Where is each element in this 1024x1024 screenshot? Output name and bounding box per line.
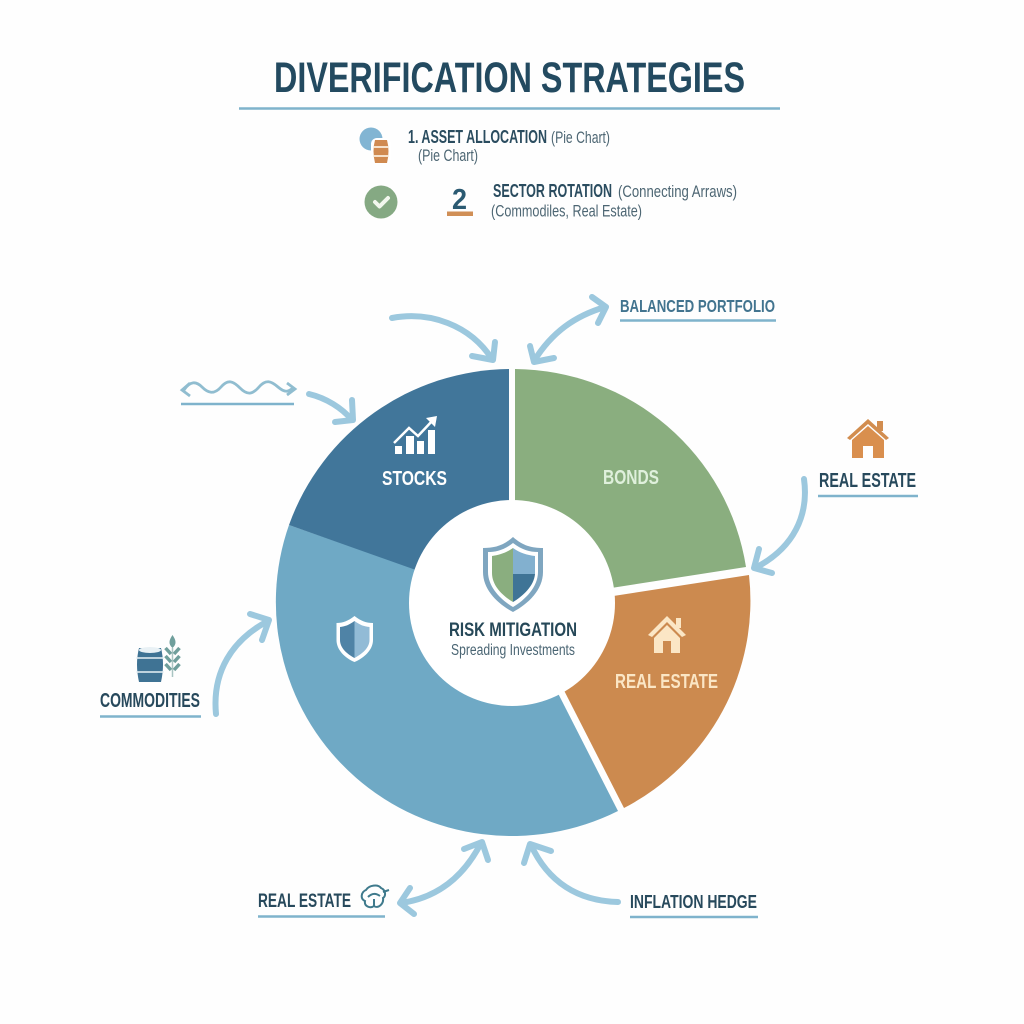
bonds label: BONDS bbox=[603, 466, 659, 489]
arrow: wave to stocks bbox=[309, 394, 353, 422]
icon: green check bbox=[364, 186, 398, 218]
text: asset allocation: (Pie Chart) bbox=[418, 146, 478, 165]
inflation hedge label bbox=[630, 892, 758, 917]
real estate segment label and icon: REAL ESTATE bbox=[615, 670, 718, 693]
stocks label and icon bbox=[382, 416, 447, 490]
real estate bottom callout: REAL ESTATE bbox=[258, 891, 351, 912]
text: asset allocation: 1. ASSET ALLOCATION bbox=[408, 127, 547, 147]
icon: growth chart bbox=[394, 416, 437, 454]
arrow: top to donut bbox=[392, 316, 495, 360]
commodities callout bbox=[100, 635, 201, 716]
segment: commodities (light blue) bbox=[276, 525, 618, 836]
arrow: real estate bottom double-headed bbox=[400, 842, 488, 914]
donut chart bbox=[276, 369, 750, 836]
text: sector rotation: (Commodiles, Real Estate) bbox=[491, 202, 642, 220]
arrow: commodities to donut bbox=[215, 614, 269, 714]
icon: wavy double arrow bbox=[181, 382, 295, 404]
icon: barrel and wheat bbox=[136, 635, 180, 682]
number 2: 2 bbox=[452, 184, 467, 216]
real estate segment label and icon bbox=[615, 616, 718, 693]
arrow: balanced portfolio double-headed bbox=[530, 297, 606, 362]
strategy item 1: asset allocation bbox=[360, 127, 610, 165]
icon: house bbox=[648, 616, 686, 653]
inflation hedge label: INFLATION HEDGE bbox=[630, 892, 757, 912]
center: risk mitigation: RISK MITIGATION bbox=[449, 620, 577, 641]
segment: bonds bbox=[515, 369, 746, 603]
real estate bottom callout bbox=[258, 886, 389, 916]
center circle bbox=[409, 500, 615, 706]
segment: stocks bbox=[289, 369, 509, 603]
text: sector rotation bbox=[491, 181, 737, 220]
icon: pie and barrel bbox=[360, 128, 391, 164]
text: asset allocation: (Pie Chart) bbox=[551, 128, 610, 147]
strategy item 2: sector rotation bbox=[364, 181, 737, 220]
balanced portfolio label: BALANCED PORTFOLIO bbox=[620, 296, 775, 316]
real estate callout: REAL ESTATE bbox=[819, 470, 916, 492]
text: sector rotation: SECTOR ROTATION bbox=[493, 181, 612, 201]
text: asset allocation bbox=[408, 127, 610, 165]
arrow: inflation hedge to donut bbox=[524, 844, 618, 902]
number 2 bbox=[447, 184, 473, 216]
icon: orange house bbox=[847, 419, 889, 458]
center: risk mitigation: Spreading Investments bbox=[451, 642, 575, 659]
title: DIVERIFICATION STRATEGIES bbox=[274, 54, 745, 102]
text: sector rotation: (Connecting Arraws) bbox=[618, 182, 737, 201]
icon: cloud tree bbox=[362, 886, 389, 907]
segment: real estate bbox=[523, 575, 750, 808]
real estate callout bbox=[818, 419, 918, 496]
icon: shield bbox=[483, 537, 543, 612]
stocks label and icon: STOCKS bbox=[382, 467, 447, 490]
commodities callout: COMMODITIES bbox=[100, 690, 200, 712]
icon: shield on commodities segment bbox=[336, 616, 373, 662]
center: risk mitigation bbox=[449, 537, 577, 659]
arrow: real estate to bonds bbox=[754, 479, 805, 573]
